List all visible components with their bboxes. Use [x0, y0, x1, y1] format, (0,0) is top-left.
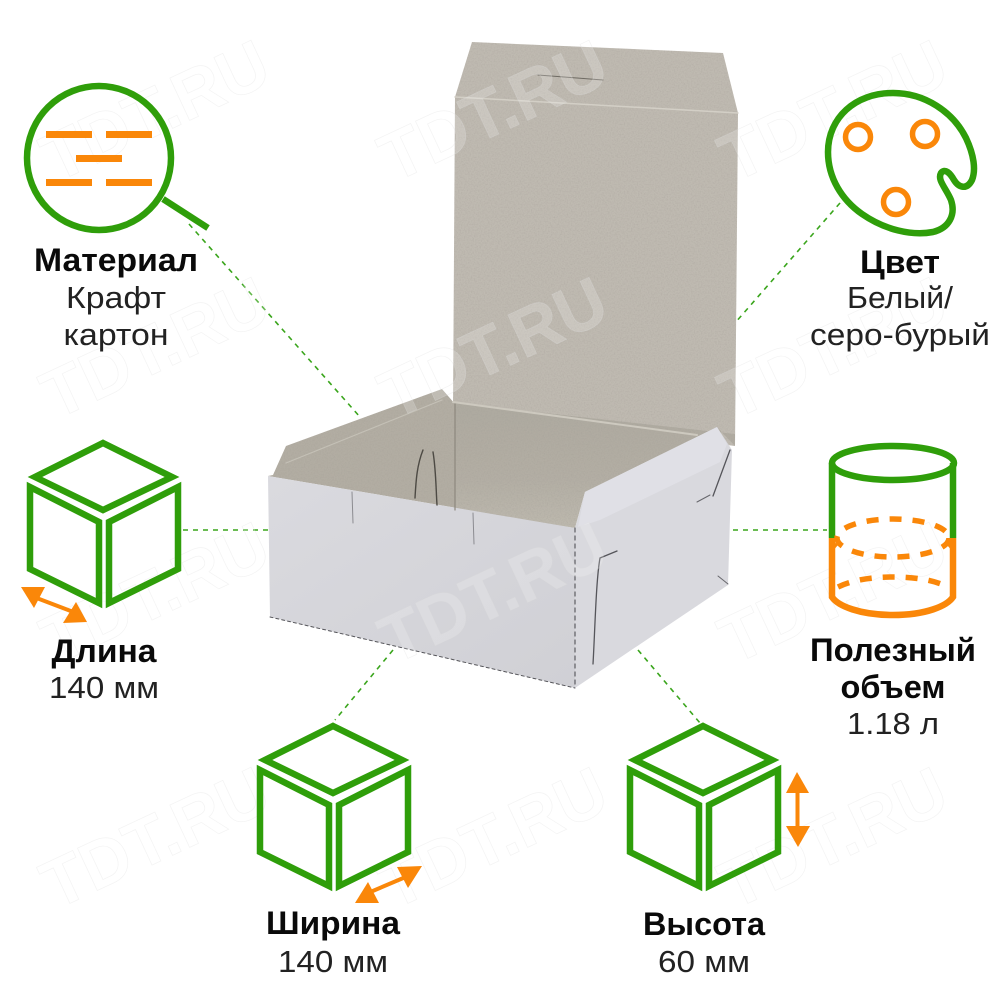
connector lines [183, 203, 840, 723]
text: colour label: Цвет [860, 244, 940, 280]
icon: cylinder [829, 446, 956, 615]
text: volume label: Полезный [810, 632, 976, 668]
panel: length [21, 443, 178, 705]
text: width label: Ширина [266, 905, 400, 941]
text: height value: 60 мм [658, 944, 750, 979]
text: height label: Высота [643, 906, 765, 942]
icon: cube with height arrow [630, 726, 810, 886]
text: volume label line 2: объем [840, 669, 946, 705]
watermarks: TDT.RU [708, 263, 959, 434]
text: material value: Крафт [66, 280, 166, 315]
watermarks: TDT.RU [368, 508, 619, 679]
panel: material [27, 86, 208, 352]
icon: cube with length arrow [21, 443, 178, 623]
text: length label: Длина [52, 633, 157, 669]
panel: width [260, 726, 422, 979]
text: material value line 2: картон [64, 317, 168, 352]
text: colour value: Белый/ [847, 280, 953, 315]
box lid (inside surface) [453, 42, 738, 446]
watermarks: TDT.RU [708, 753, 959, 924]
icon: palette [828, 93, 974, 233]
watermarks: TDT.RU [30, 508, 281, 679]
flap highlight [578, 427, 727, 527]
watermarks: TDT.RU [30, 753, 281, 924]
watermarks: TDT.RU [368, 26, 619, 197]
icon: magnifier with texture lines [27, 86, 208, 230]
watermarks: TDT.RU [708, 26, 959, 197]
product photo: open cardboard box [268, 42, 738, 688]
watermarks: TDT.RU [30, 263, 281, 434]
icon: cube with width arrow [260, 726, 422, 903]
watermarks: TDT.RU [30, 26, 281, 197]
text: material label: Материал [34, 242, 198, 278]
text: volume value: 1.18 л [847, 706, 939, 741]
panel: colour [810, 93, 990, 352]
right face with folded flap [575, 427, 732, 688]
front face [268, 476, 575, 688]
text: width value: 140 мм [278, 944, 388, 979]
left inner flap [268, 389, 575, 528]
text: colour value line 2: серо-бурый [810, 317, 990, 352]
panel: usable volume [810, 446, 976, 741]
watermarks: TDT.RU [368, 753, 619, 924]
watermarks: TDT.RU [368, 263, 619, 434]
text: length value: 140 мм [49, 670, 159, 705]
box interior [453, 403, 735, 528]
watermarks: TDT.RU [708, 508, 959, 679]
crease lines and slits [270, 75, 738, 688]
panel: height [630, 726, 810, 979]
